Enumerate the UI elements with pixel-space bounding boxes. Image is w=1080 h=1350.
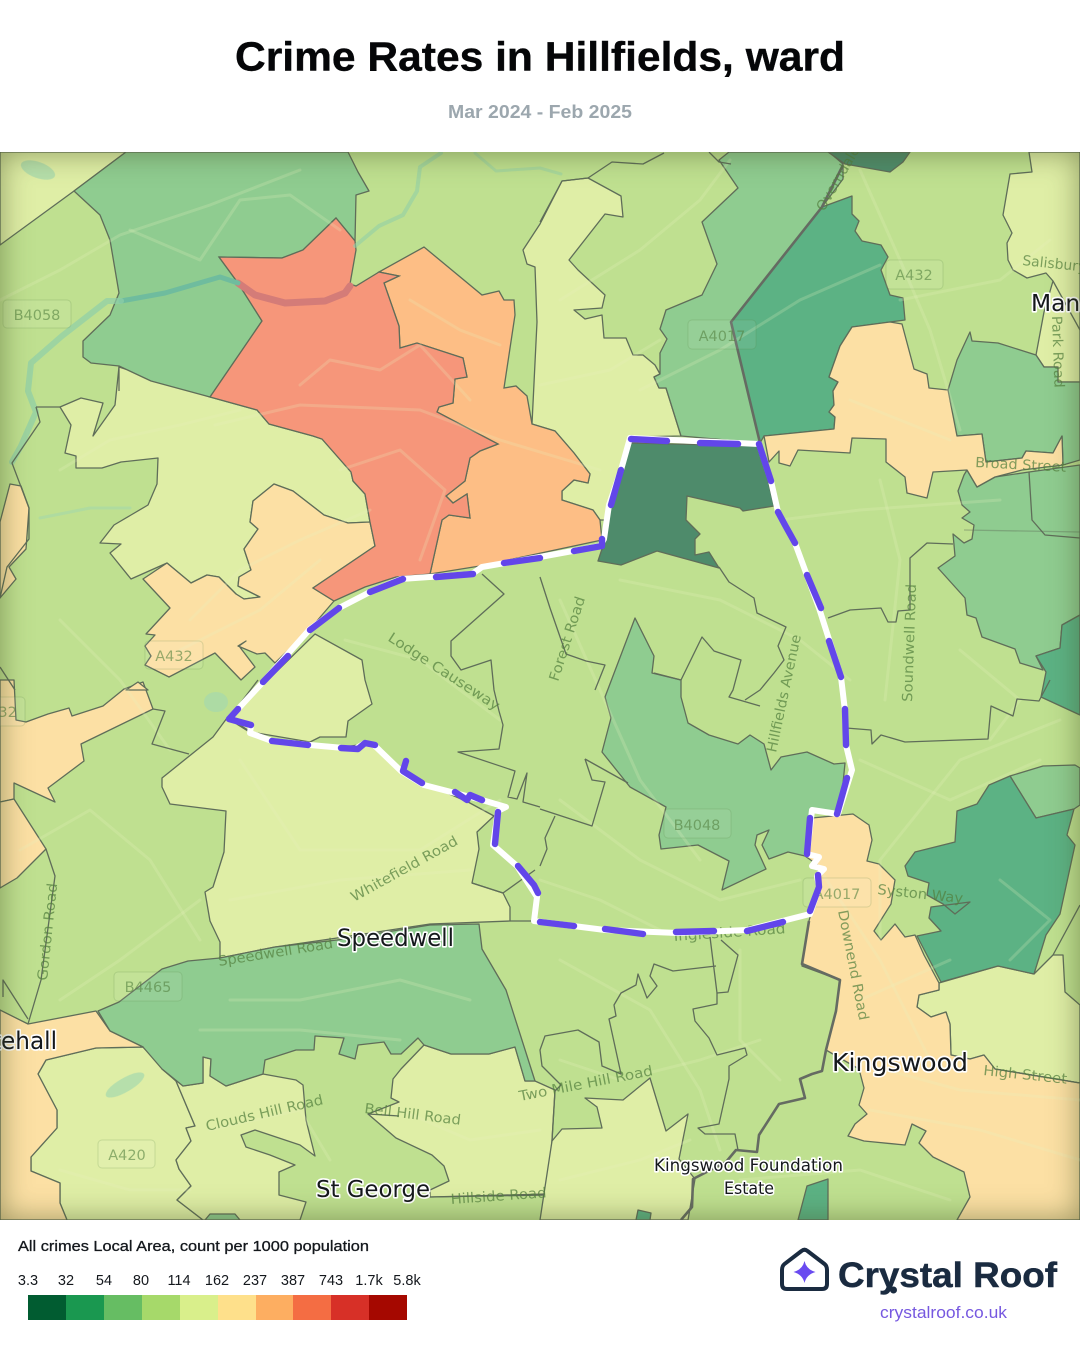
road shields: B4465 <box>125 980 171 996</box>
rivers <box>12 153 561 518</box>
road labels: High Street <box>983 1063 1068 1088</box>
heavy district boundary <box>681 165 843 1220</box>
title: Crime Rates in Hillfields, ward <box>235 34 845 80</box>
lakes <box>18 156 228 1102</box>
legend scale labels: 743 <box>319 1273 343 1289</box>
local areas: mid green <box>74 152 1080 1220</box>
road labels: Downend Road <box>834 909 871 1022</box>
legend colour bar <box>28 1295 407 1320</box>
road labels: Lodge Causeway <box>385 630 503 714</box>
brand y descender dot <box>890 1286 897 1294</box>
road shields <box>0 260 943 1168</box>
icon: house with sparkle <box>782 1250 827 1289</box>
map edge vignette <box>0 152 1080 1220</box>
road labels: Soundwell Road <box>900 584 920 702</box>
legend scale labels: 114 <box>167 1273 191 1289</box>
title <box>235 34 845 122</box>
title: Mar 2024 - Feb 2025 <box>448 101 632 122</box>
local area: orange <box>379 247 602 574</box>
road labels: Park Road <box>1048 316 1067 388</box>
place labels: St George <box>316 1177 430 1203</box>
place labels: Estate <box>724 1179 774 1199</box>
road labels: Ingleside Road <box>673 921 786 945</box>
road shields: A4017 <box>699 329 745 345</box>
local areas: dark green <box>636 196 1080 1220</box>
road labels: Syston Way <box>877 882 964 907</box>
road shields: A432 <box>155 649 193 665</box>
legend scale labels: 162 <box>205 1273 229 1289</box>
local areas: pale band <box>0 152 1080 1220</box>
legend scale labels: 54 <box>96 1273 112 1289</box>
road shields: A420 <box>108 1148 146 1164</box>
road labels: Gordon Road <box>35 882 61 981</box>
brand name: Crystal Roof <box>838 1256 1057 1295</box>
road labels: Forest Road <box>547 595 589 683</box>
place labels: Speedwell <box>337 924 454 952</box>
road labels: Hillfields Avenue <box>764 633 805 754</box>
legend <box>18 1239 421 1320</box>
ward boundary: Hillfields <box>229 438 852 934</box>
road labels: Hillside Road <box>450 1185 547 1208</box>
panel: choropleth map <box>0 152 1080 1220</box>
legend scale labels: 1.7k <box>355 1273 383 1289</box>
road labels: Clouds Hill Road <box>204 1092 325 1135</box>
place labels <box>0 291 1080 1203</box>
road labels: Whitefield Road <box>348 833 461 905</box>
legend scale labels: 237 <box>243 1273 267 1289</box>
logo: Crystal Roof <box>780 1248 1058 1322</box>
local areas: tan <box>0 322 1080 1220</box>
legend scale labels: 387 <box>281 1273 305 1289</box>
place labels: Kingswood Foundation <box>654 1156 843 1176</box>
place labels: Kingswood <box>832 1048 968 1077</box>
legend scale labels: 80 <box>133 1273 149 1289</box>
road labels <box>35 144 1080 1208</box>
area boundaries <box>0 152 1080 1197</box>
legend scale labels: 32 <box>58 1273 74 1289</box>
road shields: B4048 <box>674 818 720 834</box>
legend scale labels: 5.8k <box>393 1273 421 1289</box>
road labels: Two Mile Hill Road <box>517 1063 654 1105</box>
road shields: A432 <box>895 268 933 284</box>
road labels: Bell Hill Road <box>364 1101 462 1129</box>
local area: darkest low-crime <box>598 152 910 568</box>
legend scale labels <box>18 1273 421 1289</box>
road labels: Speedwell Road <box>217 936 334 970</box>
street network <box>0 160 1080 1200</box>
road labels: Broad Street <box>975 455 1067 476</box>
local area: salmon high-crime <box>210 218 498 601</box>
brand url: crystalroof.co.uk <box>880 1304 1008 1322</box>
legend scale labels: 3.3 <box>18 1273 38 1289</box>
road shields: A4017 <box>814 887 860 903</box>
road shields: B4058 <box>14 308 60 324</box>
legend title: All crimes Local Area, count per 1000 population <box>18 1239 369 1255</box>
